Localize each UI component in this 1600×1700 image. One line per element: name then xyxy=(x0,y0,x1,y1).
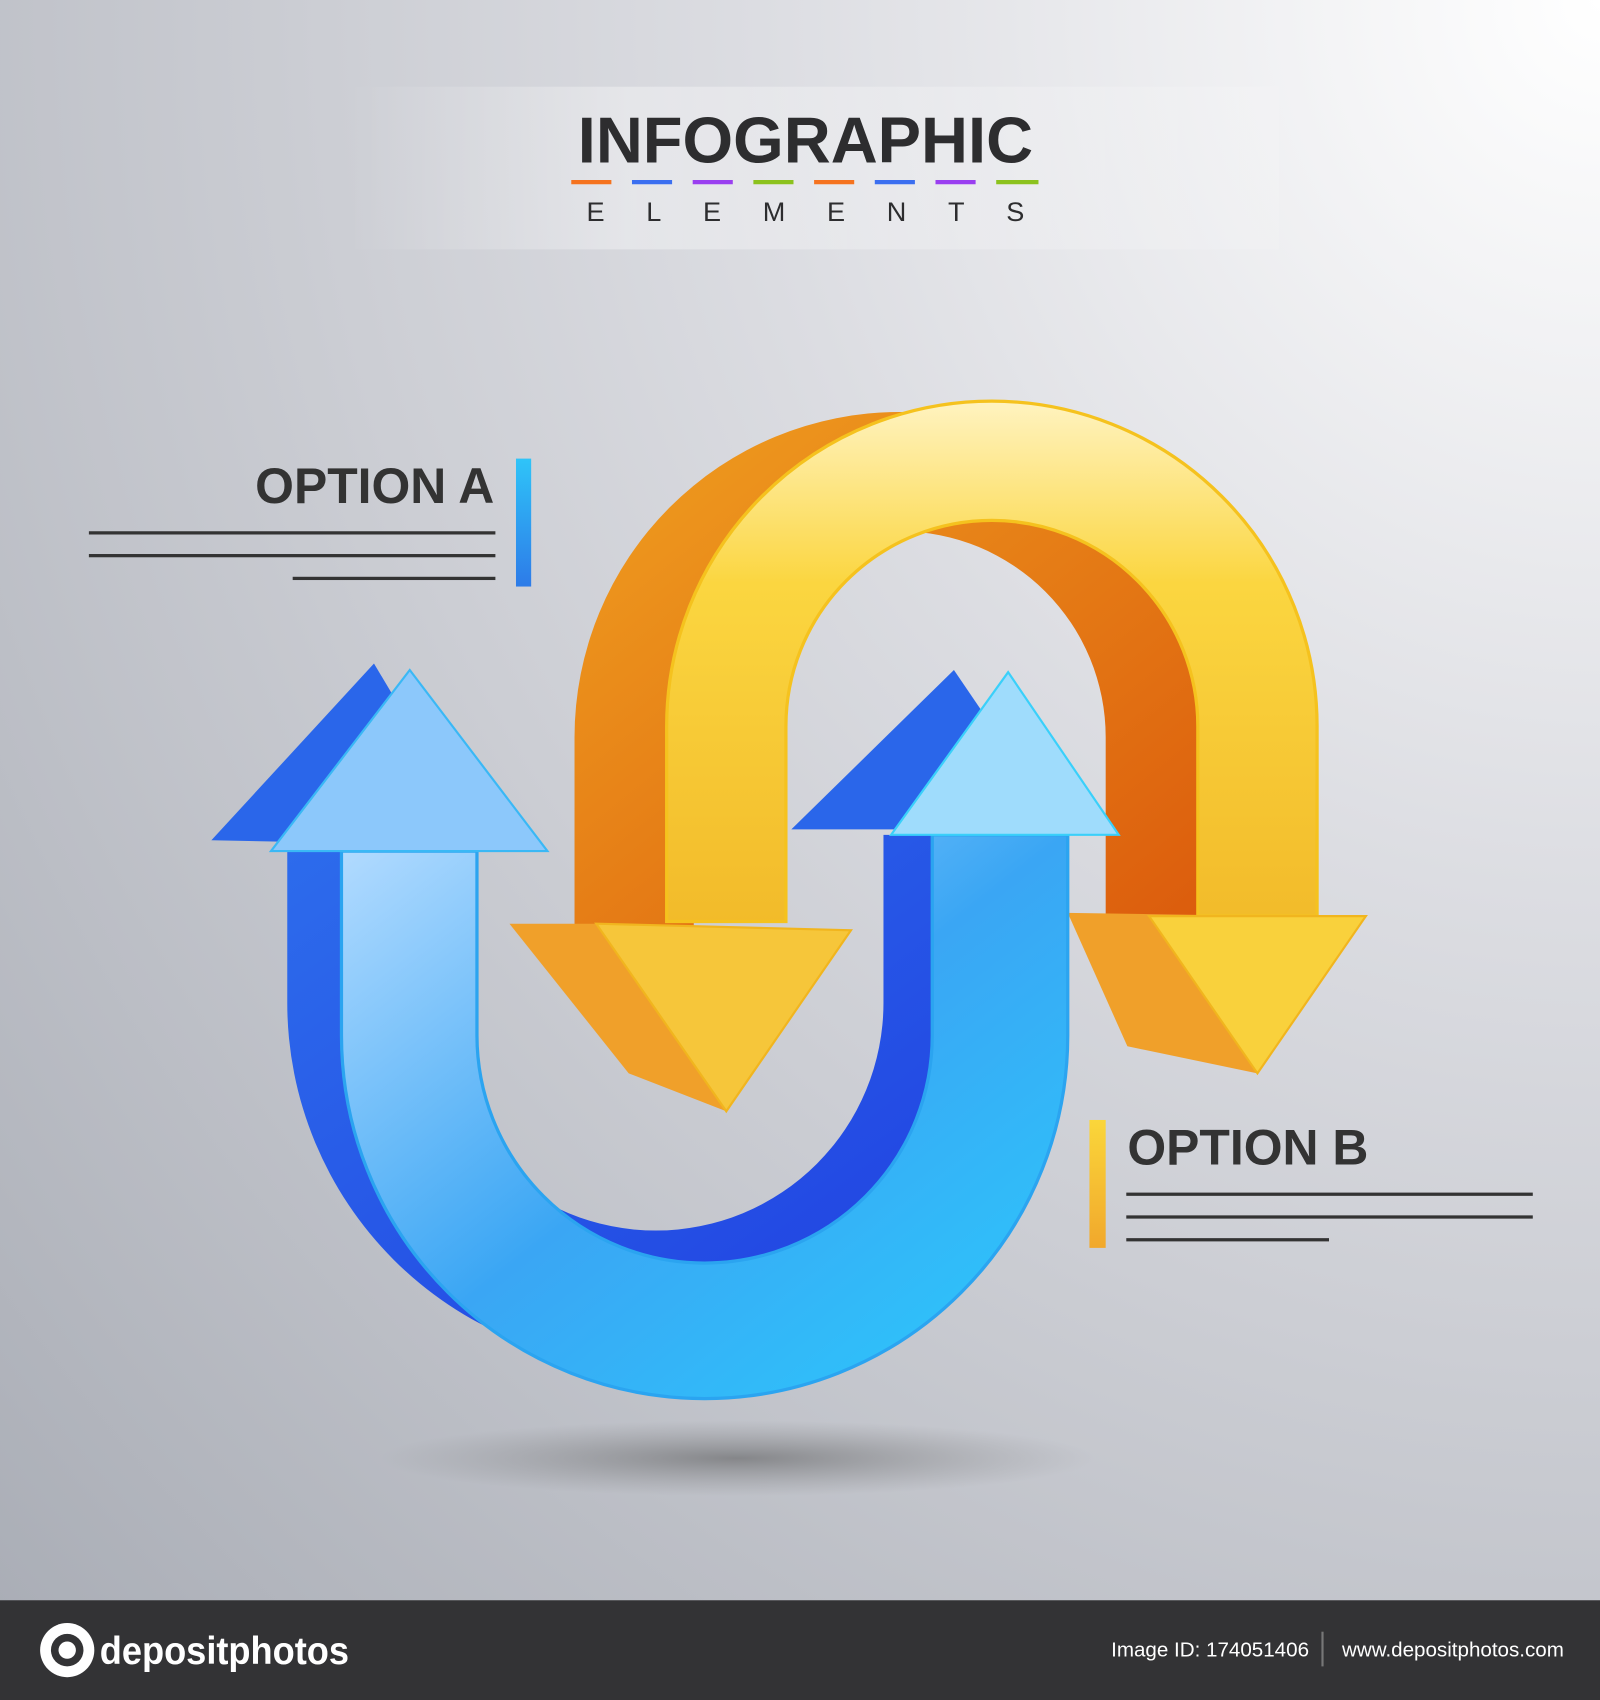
title: ELEMENTS xyxy=(586,196,1024,227)
title: INFOGRAPHIC xyxy=(578,104,1033,177)
option B xyxy=(1089,1119,1533,1248)
title xyxy=(571,104,1038,227)
footer: depositphotos xyxy=(100,1630,349,1673)
option A xyxy=(89,458,531,587)
footer xyxy=(0,1600,1600,1700)
option B: OPTION B xyxy=(1127,1119,1368,1175)
shadow xyxy=(379,1420,1095,1496)
option A: OPTION A xyxy=(255,458,494,514)
orange left arrowhead front xyxy=(596,924,851,1111)
footer: www.depositphotos.com xyxy=(1341,1639,1564,1662)
footer: Image ID: 174051406 xyxy=(1111,1639,1309,1662)
blue arrow xyxy=(211,664,1119,1399)
orange arrow xyxy=(509,401,1366,1111)
